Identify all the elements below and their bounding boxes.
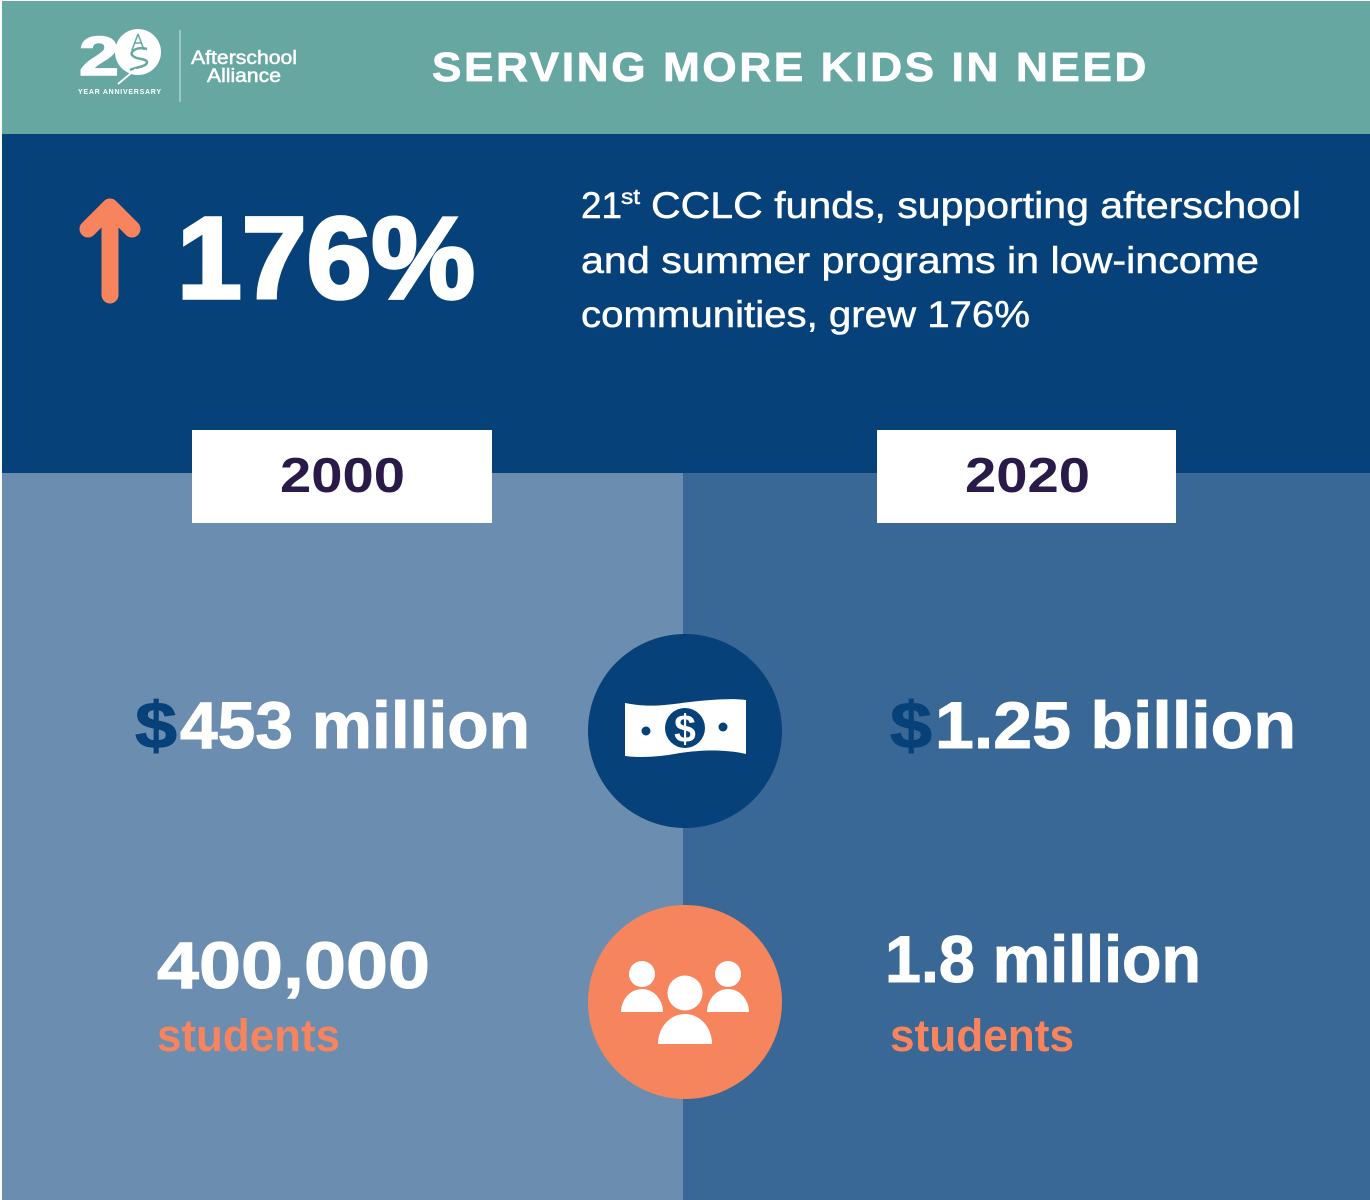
icon: up arrow <box>88 207 132 295</box>
funding amount: $1.25 billion: 1.25 billion <box>935 688 1296 762</box>
icon: dollar bill in navy circle: $ <box>674 708 696 751</box>
description text: 21 <box>581 185 622 226</box>
funding amount: $453 million: 453 million <box>180 688 530 762</box>
icon: three people in orange circle <box>588 905 782 1099</box>
logo: Afterschool Alliance 20 year anniversary <box>78 25 297 102</box>
student count: 1.8 million students: students <box>890 1010 1074 1061</box>
panel: header band <box>2 1 1370 134</box>
description text: communities, grew 176% <box>581 294 1030 335</box>
funding amount: $1.25 billion: $ <box>890 688 932 762</box>
logo: Afterschool Alliance 20 year anniversary: Afterschool <box>191 48 297 69</box>
panel: 176% growth summary <box>2 134 1370 473</box>
big statistic: 176%: 176% <box>177 193 475 323</box>
icon: dollar bill in navy circle <box>588 634 782 828</box>
student count: 400,000 students: students <box>157 1010 340 1061</box>
logo: Afterschool Alliance 20 year anniversary: YEAR ANNIVERSARY <box>78 89 161 96</box>
year label: 2000: 2000 <box>280 449 405 503</box>
student count: 400,000 students: 400,000 <box>157 928 430 1002</box>
description text: st <box>621 186 640 209</box>
panel: 2020 column <box>683 430 1370 1200</box>
funding amount: $453 million: $ <box>135 688 177 762</box>
logo: Afterschool Alliance 20 year anniversary: 2 <box>79 25 119 87</box>
description text: and summer programs in low-income <box>581 240 1259 281</box>
description text: CCLC funds, supporting afterschool <box>651 185 1301 226</box>
panel: 2000 column <box>2 430 683 1200</box>
student count: 400,000 students <box>157 928 430 1061</box>
year label: 2020 <box>877 430 1176 523</box>
description text <box>581 185 1301 335</box>
student count: 1.8 million students: 1.8 million <box>885 922 1201 996</box>
year label: 2000 <box>192 430 492 523</box>
year label: 2020: 2020 <box>965 449 1090 503</box>
student count: 1.8 million students <box>885 922 1201 1061</box>
logo: Afterschool Alliance 20 year anniversary: Alliance <box>207 66 281 87</box>
title: SERVING MORE KIDS IN NEED <box>432 44 1149 90</box>
